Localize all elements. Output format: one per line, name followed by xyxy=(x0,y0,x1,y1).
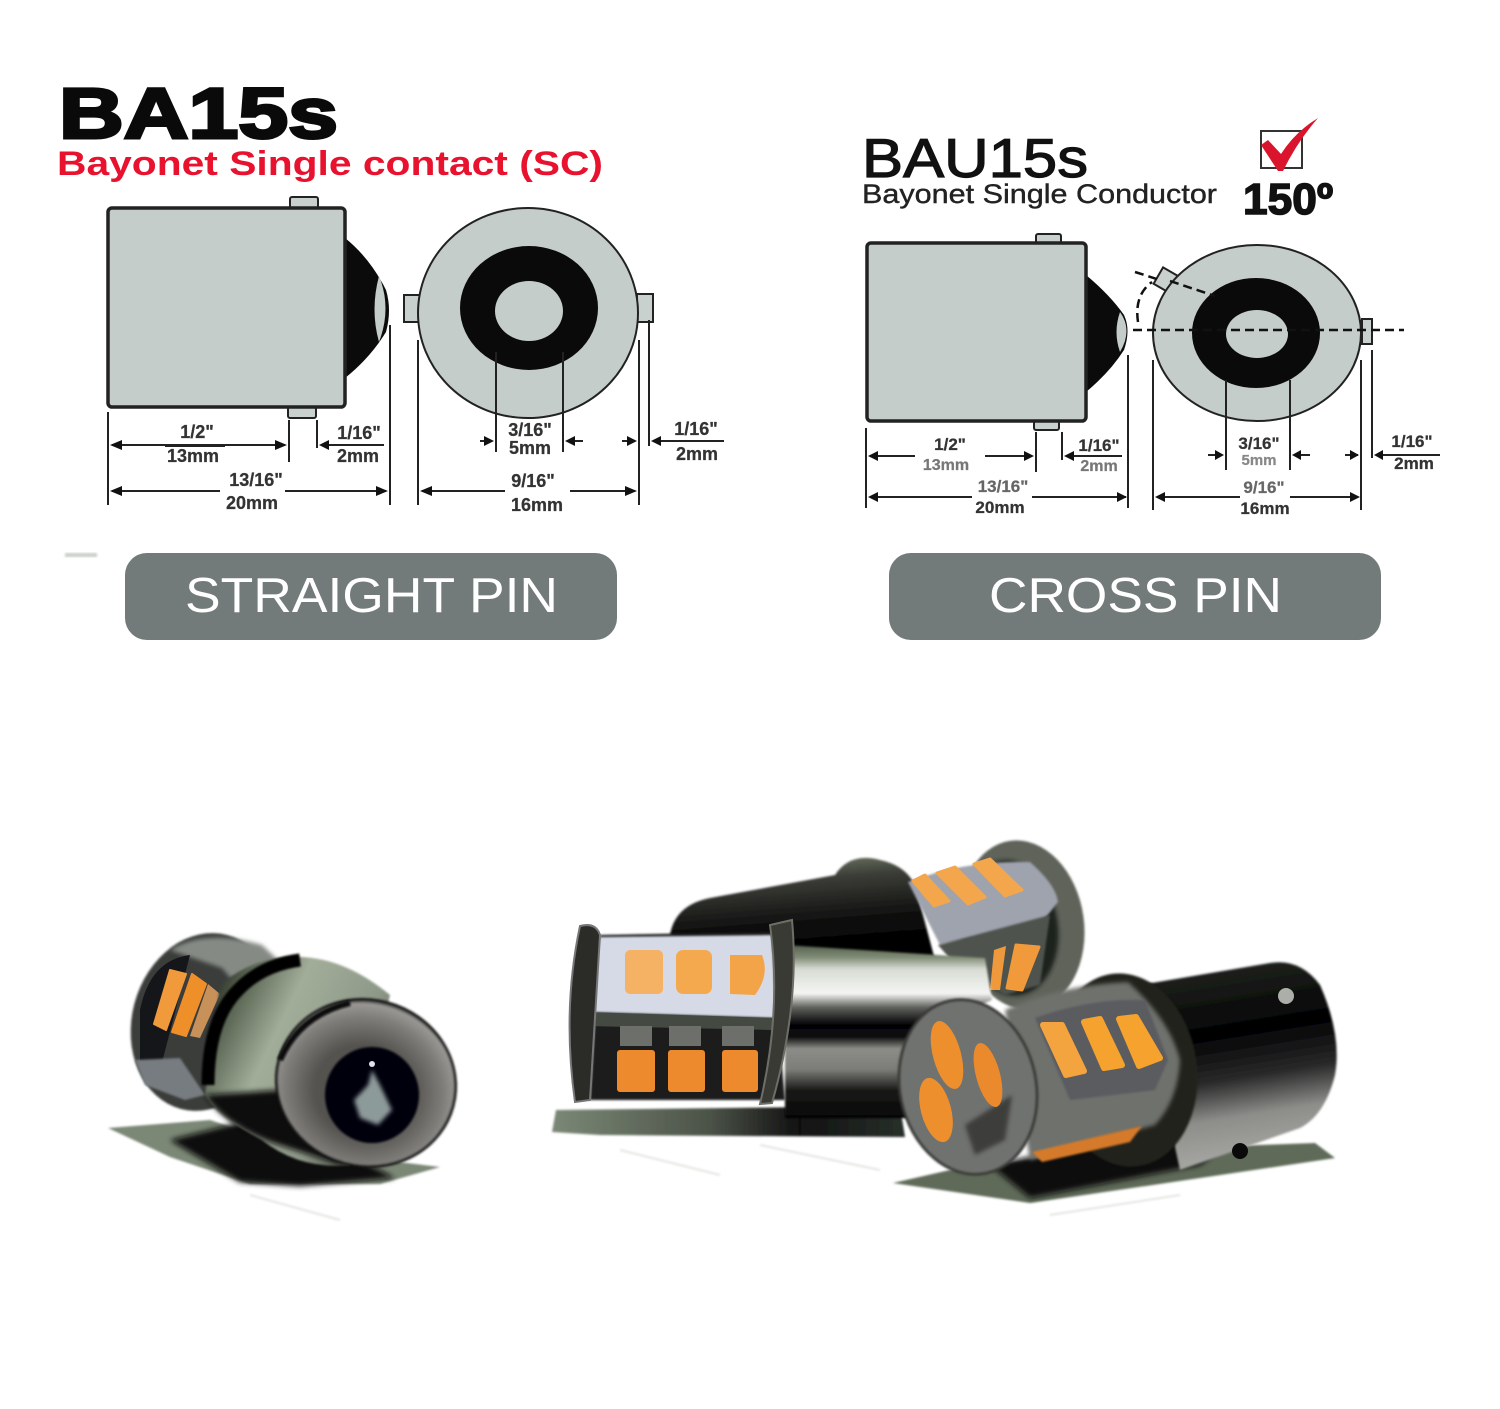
dashed 150 degree angle guides xyxy=(1133,272,1404,330)
dimension label: 9/16 inch 16mm xyxy=(1240,478,1290,518)
dimension label: 3/16 inch 5mm xyxy=(1238,434,1280,469)
dimension label: 1/16 inch 2mm end view: 2mm xyxy=(676,444,718,464)
button: straight pin xyxy=(125,553,617,640)
dimension label: 1/16 inch 2mm end view: 1/16" xyxy=(1391,432,1433,451)
front bulb face with LEDs xyxy=(883,987,1053,1187)
dimension label: 1/16 inch 2mm end view xyxy=(1391,432,1434,473)
front bulb LED drum xyxy=(1005,964,1210,1176)
dimension label: 1/2 inch 13mm: 13mm xyxy=(167,446,219,466)
dimension label: 1/16 inch 2mm: 2mm xyxy=(337,446,379,466)
dimension label: 1/16 inch 2mm: 1/16" xyxy=(1078,436,1120,455)
middle bulb LED head xyxy=(570,920,794,1104)
dimension label: 13/16 inch 20mm: 13/16" xyxy=(978,477,1028,496)
dimension label: 1/2 inch 13mm xyxy=(923,435,969,474)
dimension label: 9/16 inch 16mm: 16mm xyxy=(1240,499,1290,518)
side view of bulb base xyxy=(108,197,389,418)
base face with contact xyxy=(258,980,474,1186)
dimension label: 1/16 inch 2mm xyxy=(1078,436,1120,475)
front bulb pin xyxy=(1232,988,1294,1159)
dimension label: 9/16 inch 16mm: 9/16" xyxy=(511,471,555,491)
dimension label: 9/16 inch 16mm xyxy=(511,471,563,515)
dimension label: 1/2 inch 13mm: 13mm xyxy=(923,457,969,474)
subtitle: bayonet single conductor: Bayonet Single Conductor xyxy=(862,179,1217,209)
ground shadow xyxy=(108,1120,440,1186)
title: BAU15s: BAU15s xyxy=(862,127,1088,189)
dimension label: 3/16 inch 5mm xyxy=(508,420,552,458)
dimension lines xyxy=(108,320,724,515)
dimension label: 3/16 inch 5mm: 5mm xyxy=(509,438,551,458)
dimension label: 3/16 inch 5mm: 5mm xyxy=(1241,452,1277,469)
button: cross pin xyxy=(889,553,1381,640)
dimension label: 9/16 inch 16mm: 9/16" xyxy=(1243,478,1285,497)
dimension label: 13/16 inch 20mm: 20mm xyxy=(226,493,278,513)
end view of bulb base xyxy=(404,208,653,418)
back bulb xyxy=(670,832,1095,1018)
panel: BA15s straight pin xyxy=(57,75,724,515)
front bulb metal cylinder xyxy=(1140,962,1337,1170)
smudge mark xyxy=(65,553,97,557)
faint floor texture xyxy=(250,1145,1180,1220)
dimension label: 1/16 inch 2mm: 2mm xyxy=(1080,458,1118,475)
metal cylinder xyxy=(205,957,390,1166)
front bulb floor shadow xyxy=(893,1143,1335,1203)
dimension label: 1/2 inch 13mm: 1/2" xyxy=(934,435,966,454)
title: BA15s: BA15s xyxy=(59,75,338,154)
button: straight pin: STRAIGHT PIN xyxy=(185,569,558,623)
icon: red checkbox xyxy=(1261,118,1318,171)
dimension label: 1/2 inch 13mm: 1/2" xyxy=(180,422,214,442)
dimension label: 3/16 inch 5mm: 3/16" xyxy=(1238,434,1280,453)
photo: single bulb showing base contact xyxy=(108,916,474,1186)
middle bulb metal cylinder xyxy=(785,945,992,1118)
dimension label: 13/16 inch 20mm: 13/16" xyxy=(229,470,283,490)
floor shadow of middle bulb xyxy=(552,1106,905,1137)
dimension label: 13/16 inch 20mm xyxy=(226,470,283,513)
subtitle: bayonet single contact: Bayonet Single contact (SC) xyxy=(57,145,603,183)
dimension label: 1/16 inch 2mm end view: 1/16" xyxy=(674,419,718,439)
panel: BAU15s cross pin xyxy=(862,118,1440,518)
dimension label: 13/16 inch 20mm: 20mm xyxy=(975,498,1025,517)
dimension label: 1/16 inch 2mm end view: 2mm xyxy=(1394,454,1434,473)
dimension label: 1/16 inch 2mm end view xyxy=(674,419,718,464)
dimension label: 1/16 inch 2mm: 1/16" xyxy=(337,423,381,443)
end view of bulb base xyxy=(1153,245,1372,421)
dimension label: 3/16 inch 5mm: 3/16" xyxy=(508,420,552,440)
side view of bulb base xyxy=(867,234,1128,430)
dimension label: 1/2 inch 13mm xyxy=(167,422,219,466)
button: cross pin: CROSS PIN xyxy=(989,569,1282,623)
dimension label: 1/16 inch 2mm xyxy=(337,423,381,466)
LED head xyxy=(111,916,297,1128)
dimension lines xyxy=(866,350,1440,518)
angle label: 150 degrees: 150º xyxy=(1243,175,1333,224)
dimension label: 13/16 inch 20mm xyxy=(975,477,1028,517)
photo: group of three LED bulbs xyxy=(250,832,1337,1220)
dimension label: 9/16 inch 16mm: 16mm xyxy=(511,495,563,515)
